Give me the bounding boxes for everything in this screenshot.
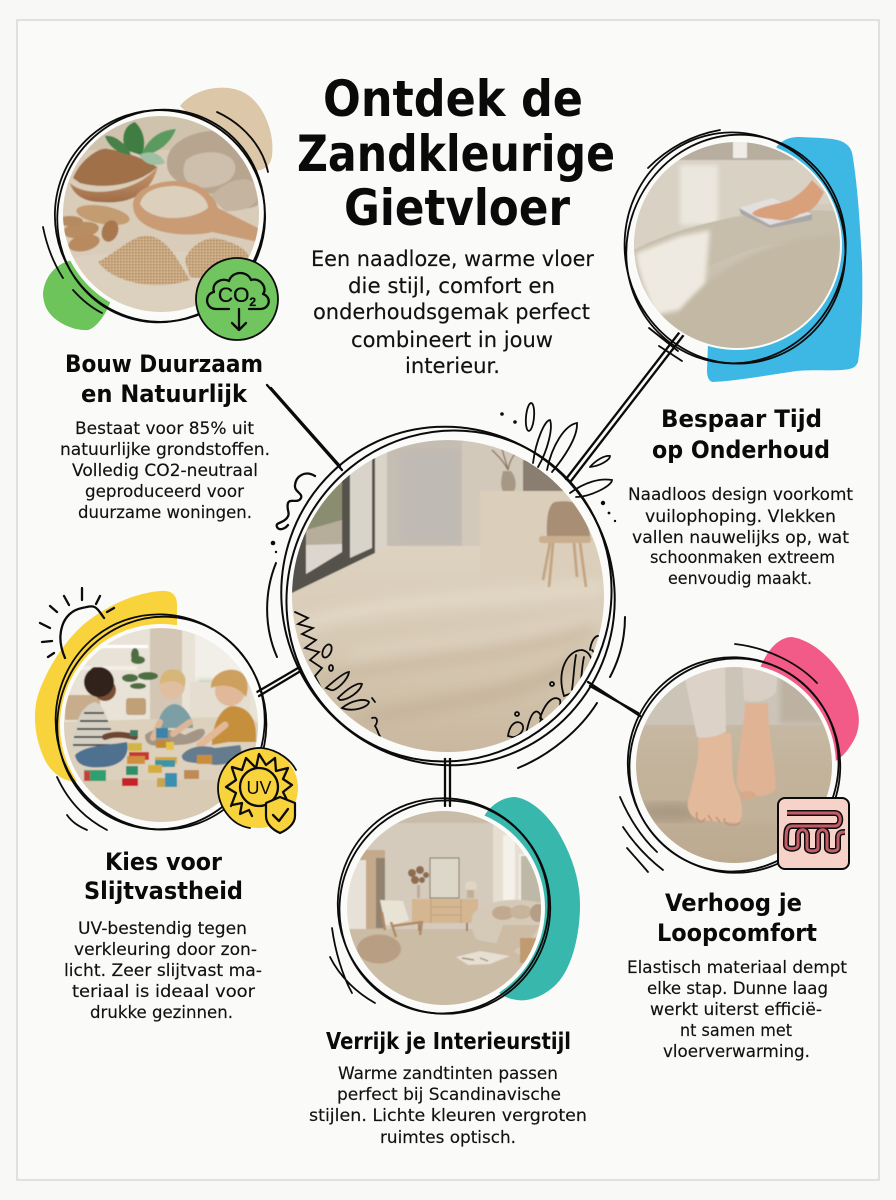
plant	[417, 885, 420, 898]
body text: perfect bij Scandinavische	[337, 1085, 561, 1104]
photo: sand coloured floor room	[290, 438, 610, 760]
body text: drukke gezinnen.	[90, 1003, 233, 1022]
icon: floor heating	[778, 798, 849, 869]
intro text: combineert in jouw	[351, 328, 553, 352]
photo: natural ingredients	[63, 116, 259, 312]
blob: tan	[180, 88, 272, 170]
body text: geproduceerd voor	[85, 482, 244, 501]
panel: natural materials	[42, 88, 279, 341]
icon: UV sun badge: UV	[246, 778, 272, 798]
heading: Bespaar Tijd	[661, 405, 822, 433]
sideboard	[412, 899, 478, 923]
icon: CO2 cloud badge: CO	[218, 284, 249, 307]
title: Ontdek de	[323, 70, 583, 128]
body text: ruimtes optisch.	[380, 1128, 516, 1147]
panel: easy maintenance	[624, 129, 862, 382]
counter	[480, 491, 610, 578]
hand-drawn rings	[595, 624, 873, 906]
art	[430, 858, 459, 898]
sack	[167, 131, 258, 208]
hand-drawn rings	[226, 371, 672, 821]
body text	[60, 419, 270, 522]
heading: op Onderhoud	[652, 436, 830, 464]
white ring	[60, 624, 262, 826]
body text: vuilophoping. Vlekken	[645, 507, 836, 526]
panel text: Verrijk	[309, 1029, 587, 1147]
photo: bare feet	[636, 667, 832, 863]
hand-drawn rings	[22, 582, 300, 864]
pouf	[357, 934, 401, 964]
panel text: Bespaar Tijd	[628, 405, 854, 588]
icon: UV sun badge	[218, 748, 298, 833]
photo: living room	[347, 811, 541, 1005]
body text: teriaal is ideaal voor	[72, 982, 255, 1001]
leaves	[123, 122, 144, 155]
body text: vloerverwarming.	[663, 1042, 810, 1061]
window	[292, 458, 376, 594]
hand-drawn rings	[305, 766, 583, 1048]
white ring	[59, 112, 263, 316]
hand-drawn rings	[22, 75, 300, 357]
body text	[309, 1064, 587, 1147]
intro text: Een naadloze, warme vloer	[311, 247, 594, 271]
heading	[65, 350, 263, 408]
body text: Bestaat voor 85% uit	[75, 419, 255, 438]
body text: eenvoudig maakt.	[668, 569, 812, 588]
kid middle	[159, 681, 186, 699]
blob: pink	[760, 637, 859, 764]
body text: vallen nauwelijks op, wat	[632, 528, 850, 547]
cloth	[739, 198, 812, 228]
heading: Verhoog je	[665, 889, 802, 917]
central photo panel	[266, 402, 626, 769]
body text: UV-bestendig tegen	[78, 919, 247, 938]
floor doodles in photo	[295, 612, 601, 737]
body text	[627, 958, 848, 1061]
title	[297, 70, 615, 237]
armchair	[380, 900, 409, 925]
icon: CO2 cloud badge	[196, 258, 278, 340]
intro text	[311, 247, 594, 378]
floor	[350, 928, 524, 1005]
blob: green	[43, 260, 111, 330]
body text: Volledig CO2-neutraal	[72, 461, 258, 480]
kid left	[78, 702, 108, 722]
kid right	[214, 685, 245, 707]
body text: stijlen. Lichte kleuren vergroten	[309, 1106, 587, 1125]
heading: Slijtvastheid	[84, 877, 243, 905]
heading	[84, 848, 243, 905]
white ring	[286, 434, 610, 758]
panel: interior style	[329, 797, 580, 1015]
body text: schoonmaken extreem	[650, 548, 835, 567]
connector lines from centre circle to panels	[257, 329, 686, 806]
body text: Elastisch materiaal dempt	[627, 958, 848, 977]
panel: walking comfort	[619, 637, 859, 874]
photo: children playing	[60, 625, 265, 825]
panel: durability	[34, 586, 298, 834]
heading: Verrijk je Interieurstijl	[326, 1029, 571, 1055]
hand	[752, 180, 824, 220]
grain piles	[98, 236, 190, 285]
spoon	[133, 181, 258, 242]
blob: blue	[707, 137, 862, 382]
chair	[539, 501, 591, 587]
intro text: die stijl, comfort en	[348, 274, 555, 298]
bowl with brown powder	[70, 166, 158, 202]
panel text: Verhoog je	[627, 889, 848, 1061]
heading	[657, 889, 817, 947]
heading	[652, 405, 830, 464]
body text: licht. Zeer slijtvast ma-	[64, 961, 262, 980]
photo: cleaning floor	[630, 140, 845, 352]
body text: natuurlijke grondstoffen.	[60, 440, 270, 459]
body text: verkleuring door zon-	[74, 940, 257, 959]
body text: nt samen met	[680, 1021, 793, 1040]
sofa	[472, 900, 542, 957]
title: Gietvloer	[344, 179, 570, 237]
white ring	[632, 140, 842, 350]
dark niche	[522, 460, 564, 492]
front leg	[688, 733, 742, 823]
panel text: Kies voor	[64, 848, 262, 1022]
white ring	[343, 807, 545, 1009]
back wall	[387, 441, 462, 547]
body text: duurzame woningen.	[78, 503, 252, 522]
rug	[456, 951, 510, 965]
peanuts	[76, 204, 130, 226]
plant	[122, 648, 158, 689]
floor	[64, 717, 258, 780]
panel text: Bouw Duurzaam	[60, 350, 270, 522]
title: Zandkleurige	[297, 125, 615, 183]
white ring	[632, 663, 836, 867]
heading: Kies voor	[105, 848, 222, 876]
blocks	[130, 730, 138, 736]
icon: sun doodle	[40, 588, 114, 658]
body text	[628, 485, 854, 588]
throw blanket	[490, 925, 540, 962]
heading: Bouw Duurzaam	[65, 350, 263, 378]
icon: CO2 cloud badge: 2	[249, 295, 256, 309]
body text: elke stap. Dunne laag	[647, 979, 828, 998]
doodles around the ring	[271, 403, 616, 553]
vase	[501, 471, 516, 491]
body text: Naadloos design voorkomt	[628, 485, 854, 504]
intro text: interieur.	[405, 354, 500, 378]
heading: en Natuurlijk	[81, 380, 248, 408]
heading: Loopcomfort	[657, 919, 817, 947]
floor	[290, 546, 610, 760]
body text: Warme zandtinten passen	[338, 1064, 558, 1083]
blob: teal	[483, 797, 580, 1000]
intro text: onderhoudsgemak perfect	[313, 300, 590, 324]
body text: werkt uiterst efficië-	[650, 1000, 822, 1019]
hand-drawn rings	[594, 104, 878, 394]
body text	[64, 919, 262, 1022]
back leg	[737, 703, 776, 796]
lamp	[466, 882, 476, 890]
blob: yellow	[35, 591, 177, 781]
